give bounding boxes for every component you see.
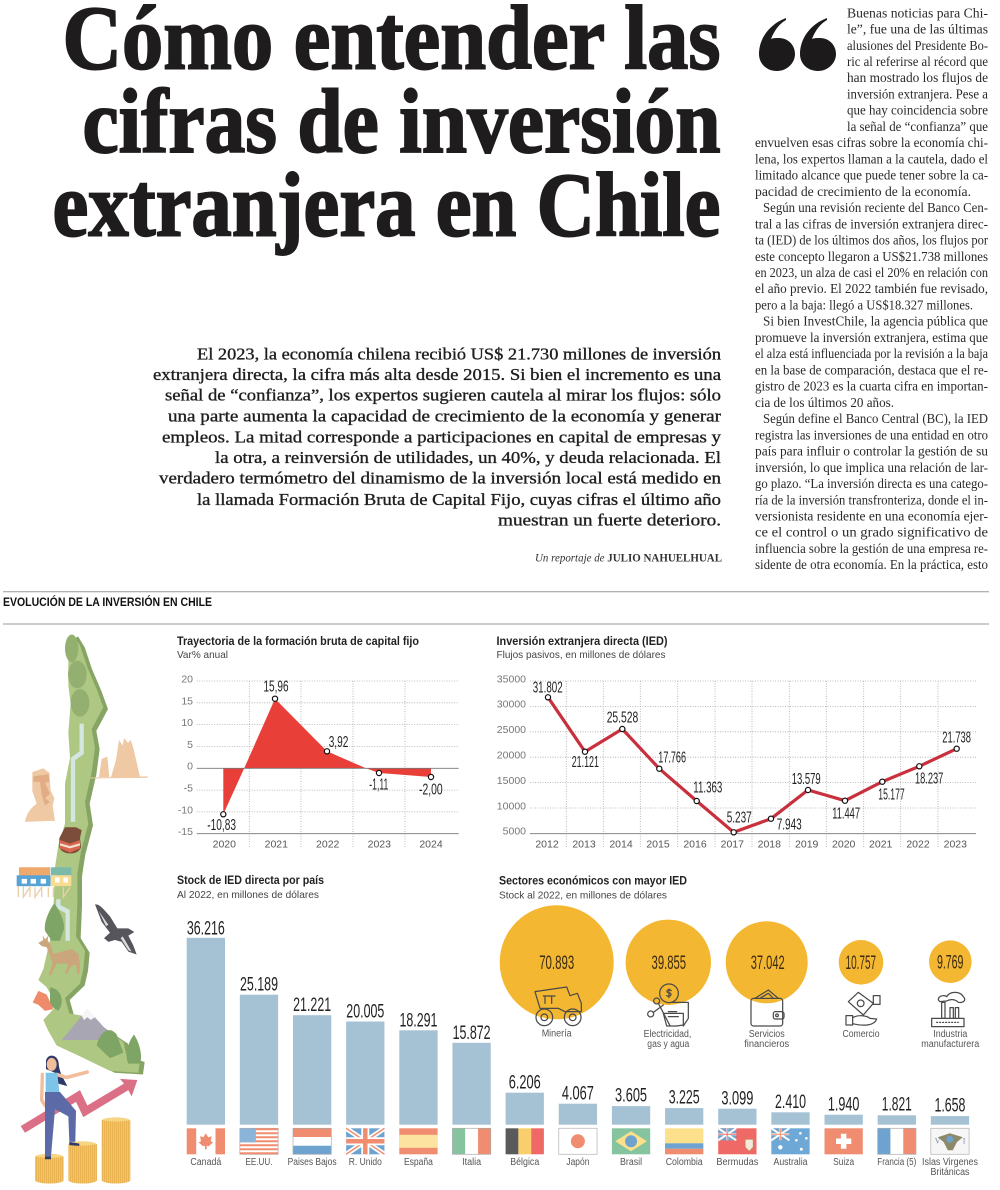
flag: United Kingdom	[346, 1128, 384, 1154]
map land	[38, 635, 140, 1073]
value labels: 31.802	[533, 679, 563, 696]
country labels: EE.UU.	[246, 1157, 272, 1168]
value labels: 21.738	[942, 729, 971, 746]
article text column: Buenas noticias para Chi-	[847, 6, 988, 21]
value labels: 11.447	[832, 806, 860, 823]
chart heading	[177, 873, 324, 901]
flag: Australia	[771, 1128, 810, 1154]
bar values: 3.099	[721, 1088, 753, 1109]
value labels: 18.237	[915, 771, 943, 788]
icon: condor	[95, 904, 137, 955]
y axis labels: 20	[181, 674, 193, 686]
y axis labels: 25000	[497, 724, 526, 736]
bar values: 4.067	[562, 1084, 594, 1104]
x axis labels: 2023	[368, 838, 391, 850]
country labels: Brasil	[620, 1157, 642, 1168]
x axis labels: 2018	[758, 838, 781, 850]
x axis labels: 2015	[646, 838, 670, 850]
illustration: map of Chile with investor	[17, 635, 148, 1184]
chart: gross fixed capital formation	[177, 634, 459, 850]
rivers	[58, 724, 82, 941]
article text column: Si bien InvestChile, la agencia pública que	[763, 315, 988, 330]
flag: Italy	[452, 1128, 491, 1154]
sector labels: manufacturera	[921, 1039, 980, 1050]
article text column: la señal de “confianza” que	[847, 120, 988, 135]
article text column: limitado alcance que puede tener sobre la ca-	[755, 169, 988, 184]
bubble values: 39.855	[652, 953, 686, 974]
area series	[223, 699, 431, 814]
value labels: 7.943	[777, 817, 802, 834]
flag: Canada	[187, 1128, 225, 1154]
bars	[187, 938, 969, 1125]
bar values: 15.872	[453, 1023, 491, 1044]
article text column: han mostrado los flujos de	[847, 71, 988, 86]
country labels: R. Unido	[349, 1157, 382, 1168]
sector labels: Comercio	[842, 1029, 880, 1040]
article text column: en la base de comparación, destaca que el re-	[755, 363, 988, 378]
bar values: 36.216	[187, 918, 225, 940]
x axis labels: 2022	[316, 838, 340, 850]
article text column	[755, 6, 989, 573]
y axis labels	[497, 673, 526, 838]
country labels: Bélgica	[510, 1157, 540, 1168]
chart heading	[496, 634, 668, 661]
icon: quotation mark	[759, 18, 836, 71]
x axis labels: 2023	[944, 838, 967, 850]
icon: wallet	[751, 990, 784, 1026]
sector labels: Minería	[542, 1029, 572, 1040]
country labels: Suiza	[833, 1157, 855, 1168]
value labels: 11.363	[693, 780, 722, 797]
bubbles	[500, 905, 972, 1019]
value labels	[207, 679, 443, 834]
icon: mining truck	[535, 987, 581, 1026]
y axis labels: 10	[181, 717, 193, 729]
country labels: Italia	[462, 1157, 482, 1168]
flag: Colombia	[665, 1128, 703, 1154]
bar values: 6.206	[509, 1072, 541, 1094]
flag: British Virgin Islands	[931, 1128, 969, 1154]
icon: flower	[33, 987, 62, 1011]
bubble values: 9.769	[937, 952, 963, 973]
y axis labels: -10	[178, 804, 193, 816]
bubble values: 10.757	[846, 953, 876, 974]
country labels: Australia	[774, 1157, 808, 1168]
intro text block: señal de “confianza”, los expertos sugieren cautela al mirar los flujos: sólo	[165, 386, 721, 405]
map shadow side	[43, 636, 145, 1075]
value labels: 17.766	[658, 749, 686, 766]
y axis labels: 30000	[497, 699, 526, 711]
bar values: 25.189	[240, 975, 278, 996]
icon: far south tree	[127, 1035, 141, 1064]
x axis labels: 2012	[535, 838, 559, 850]
title: cifras de inversión	[82, 71, 720, 172]
bar values: 20.005	[346, 1002, 384, 1022]
chart heading: Flujos pasivos, en millones de dólares	[496, 649, 666, 661]
bubble values: 70.893	[539, 953, 574, 974]
flag: France	[878, 1128, 916, 1154]
article text column: gistro de 2023 es la cuarta cifra en importan-	[755, 380, 988, 395]
icon: moai	[25, 768, 55, 822]
x axis labels	[213, 838, 443, 850]
chart heading: Sectores económicos con mayor IED	[499, 873, 687, 887]
flag: Japan	[559, 1128, 597, 1154]
icon: vase	[59, 827, 82, 854]
article text column: inversión extranjera. Pese a	[847, 88, 989, 102]
chart: sectors bubbles	[499, 873, 980, 1050]
x axis labels: 2013	[572, 838, 596, 850]
chart heading: Inversión extranjera directa (IED)	[496, 634, 668, 648]
article text column: pero a la baja: llegó a US$18.327 millones.	[755, 298, 973, 314]
data points	[545, 695, 959, 835]
sector labels: Electricidad,	[644, 1029, 691, 1040]
article text column: envuelven esas cifras sobre la economía chi-	[755, 136, 988, 151]
icon: handshake with money	[846, 992, 880, 1025]
y axis labels: 20000	[497, 750, 526, 762]
bar values	[187, 918, 965, 1116]
line series	[548, 697, 957, 832]
data points	[221, 696, 434, 817]
y axis labels: 5000	[503, 826, 526, 838]
icon: rock formation	[91, 738, 148, 779]
y axis labels: 15	[181, 695, 193, 707]
icon: factory	[932, 992, 965, 1027]
value labels	[533, 679, 971, 834]
article text column: ce el control o un grado significativo de	[755, 526, 988, 541]
flag: Netherlands	[293, 1128, 331, 1154]
y axis labels: -15	[178, 826, 193, 838]
intro text block: muestran un fuerte deterioro.	[498, 511, 721, 530]
intro text block: la otra, a reinversión de utilidades, un 40%, y deuda relacionada. El	[215, 448, 721, 467]
chart heading: Al 2022, en millones de dólares	[177, 889, 319, 901]
chart: foreign direct investment	[496, 634, 976, 850]
icon: deer	[38, 936, 80, 976]
chart heading: Trayectoria de la formación bruta de capital fijo	[177, 634, 419, 648]
country labels: Islas Virgenes	[922, 1157, 978, 1168]
icon: electricity and water	[648, 984, 688, 1026]
y axis labels: 5	[187, 739, 193, 751]
y axis labels: 0	[187, 761, 193, 773]
section heading: EVOLUCIÓN DE LA INVERSIÓN EN CHILE	[3, 594, 212, 609]
country labels: Francia (5)	[877, 1157, 916, 1168]
value labels: 15,96	[264, 679, 288, 696]
country labels	[190, 1157, 978, 1178]
value labels: 21.121	[572, 754, 599, 771]
intro text block	[153, 344, 722, 530]
country labels: Bermudas	[716, 1157, 758, 1168]
flag: Belgium	[506, 1128, 544, 1154]
intro text block: extranjera directa, la cifra más alta desde 2015. Si bien el incremento es una	[153, 365, 721, 384]
value labels: -1,11	[369, 777, 388, 794]
chart: FDI stock by country	[177, 873, 978, 1178]
flag: British Virgin Islands: I	[963, 1136, 966, 1145]
intro text block: una parte aumenta la capacidad de crecimiento de la economía y generar	[168, 407, 721, 426]
bar values: 1.821	[882, 1095, 912, 1116]
country labels: Paises Bajos	[288, 1157, 337, 1168]
article text column: tral a las cifras de inversión extranjera direc-	[755, 217, 988, 232]
value labels: 3,92	[329, 734, 348, 751]
title: extranjera en Chile	[52, 154, 720, 256]
article text column: le”, fue una de las últimas	[847, 22, 988, 38]
article text column: cia de los últimos 20 años.	[755, 396, 894, 411]
value labels: -10,83	[207, 817, 236, 834]
byline: Un reportaje de JULIO NAHUELHUAL	[535, 553, 722, 565]
icon: stilt houses	[17, 867, 71, 897]
chart heading	[177, 634, 419, 661]
icon: coin stacks	[35, 1118, 130, 1184]
intro text block: empleos. La mitad corresponde a participaciones en capital de empresas y	[162, 427, 722, 446]
country labels: Canadá	[190, 1157, 222, 1168]
y axis labels: -5	[184, 782, 193, 794]
bubble values: 37.042	[751, 953, 785, 974]
sector labels: gas y agua	[647, 1039, 690, 1050]
article text column: que hay coincidencia sobre	[847, 104, 988, 119]
chart heading	[499, 873, 687, 901]
y axis labels: 10000	[497, 800, 526, 812]
bar values: 3.605	[615, 1086, 647, 1107]
intro text block: la llamada Formación Bruta de Capital Fijo, cuyas cifras el último año	[197, 490, 721, 509]
flag: USA	[240, 1128, 278, 1154]
northern trees	[65, 635, 89, 717]
value labels: 15.177	[878, 787, 905, 804]
x axis labels: 2020	[213, 838, 236, 850]
x axis labels: 2021	[265, 838, 288, 850]
x axis labels: 2024	[419, 838, 443, 850]
x axis labels: 2022	[906, 838, 930, 850]
x axis labels: 2021	[869, 838, 893, 850]
x axis labels	[535, 838, 967, 850]
intro text block: verdadero termómetro del dinamismo de la inversión local está medido en	[159, 469, 722, 488]
country labels: España	[404, 1157, 433, 1168]
article text column: inversión, lo que implica una relación de lar-	[755, 461, 988, 476]
sector labels: Servicios	[749, 1029, 785, 1040]
flag: Switzerland	[824, 1128, 863, 1154]
chart heading: Var% anual	[177, 649, 228, 661]
x axis labels: 2014	[609, 838, 633, 850]
x axis labels: 2020	[832, 838, 856, 850]
bar values: 2.410	[775, 1092, 806, 1113]
article text column: país para influir o controlar la gestión de su	[755, 445, 988, 460]
article text column: versionista residente en una economía ejer-	[755, 510, 988, 524]
x axis labels: 2017	[721, 838, 744, 850]
flag: British Virgin Islands: V	[935, 1136, 941, 1145]
article text column: promueve la inversión extranjera, estima que	[755, 331, 988, 346]
y axis labels: 35000	[497, 673, 526, 685]
bar values: 18.291	[399, 1010, 437, 1031]
flag: Brazil	[612, 1128, 650, 1154]
country labels: Colombia	[666, 1157, 703, 1168]
bar values: 1.658	[934, 1096, 965, 1116]
value labels: 13.579	[792, 771, 821, 788]
article text column: ric al referirse al récord que	[847, 55, 988, 70]
icon: woman	[42, 1056, 87, 1159]
country labels: Británicas	[930, 1167, 970, 1178]
flag: Bermuda	[718, 1128, 756, 1154]
bubble values	[539, 952, 963, 974]
country labels: Japón	[566, 1157, 589, 1168]
sector labels: financieros	[744, 1039, 789, 1050]
y axis labels	[178, 674, 193, 838]
article text column: pacidad de crecimiento de la economía.	[755, 185, 971, 200]
bar values: 21.221	[293, 995, 331, 1016]
intro text block: El 2023, la economía chilena recibió US$ 21.730 millones de inversión	[197, 344, 722, 363]
value labels: 5.237	[727, 809, 752, 826]
title	[52, 0, 720, 256]
bar values: 3.225	[669, 1088, 700, 1109]
icon: southern tree	[45, 904, 64, 941]
x axis labels: 2016	[683, 838, 707, 850]
x axis labels: 2019	[795, 838, 819, 850]
icon: mountain	[62, 1009, 123, 1058]
sector labels	[542, 1029, 980, 1050]
value labels: 25.528	[607, 709, 638, 726]
chart heading: Stock al 2022, en millones de dólares	[499, 889, 667, 901]
value labels: -2,00	[419, 781, 443, 798]
chart heading: Stock de IED directa por país	[177, 873, 324, 887]
article text column: el año previo. El 2022 también fue revisado,	[755, 282, 988, 297]
flag: Spain	[399, 1128, 438, 1154]
bar values: 1.940	[828, 1094, 859, 1115]
icon: rising arrow	[21, 1079, 137, 1133]
sector labels: Industria	[933, 1029, 968, 1040]
y axis labels: 15000	[497, 775, 526, 787]
